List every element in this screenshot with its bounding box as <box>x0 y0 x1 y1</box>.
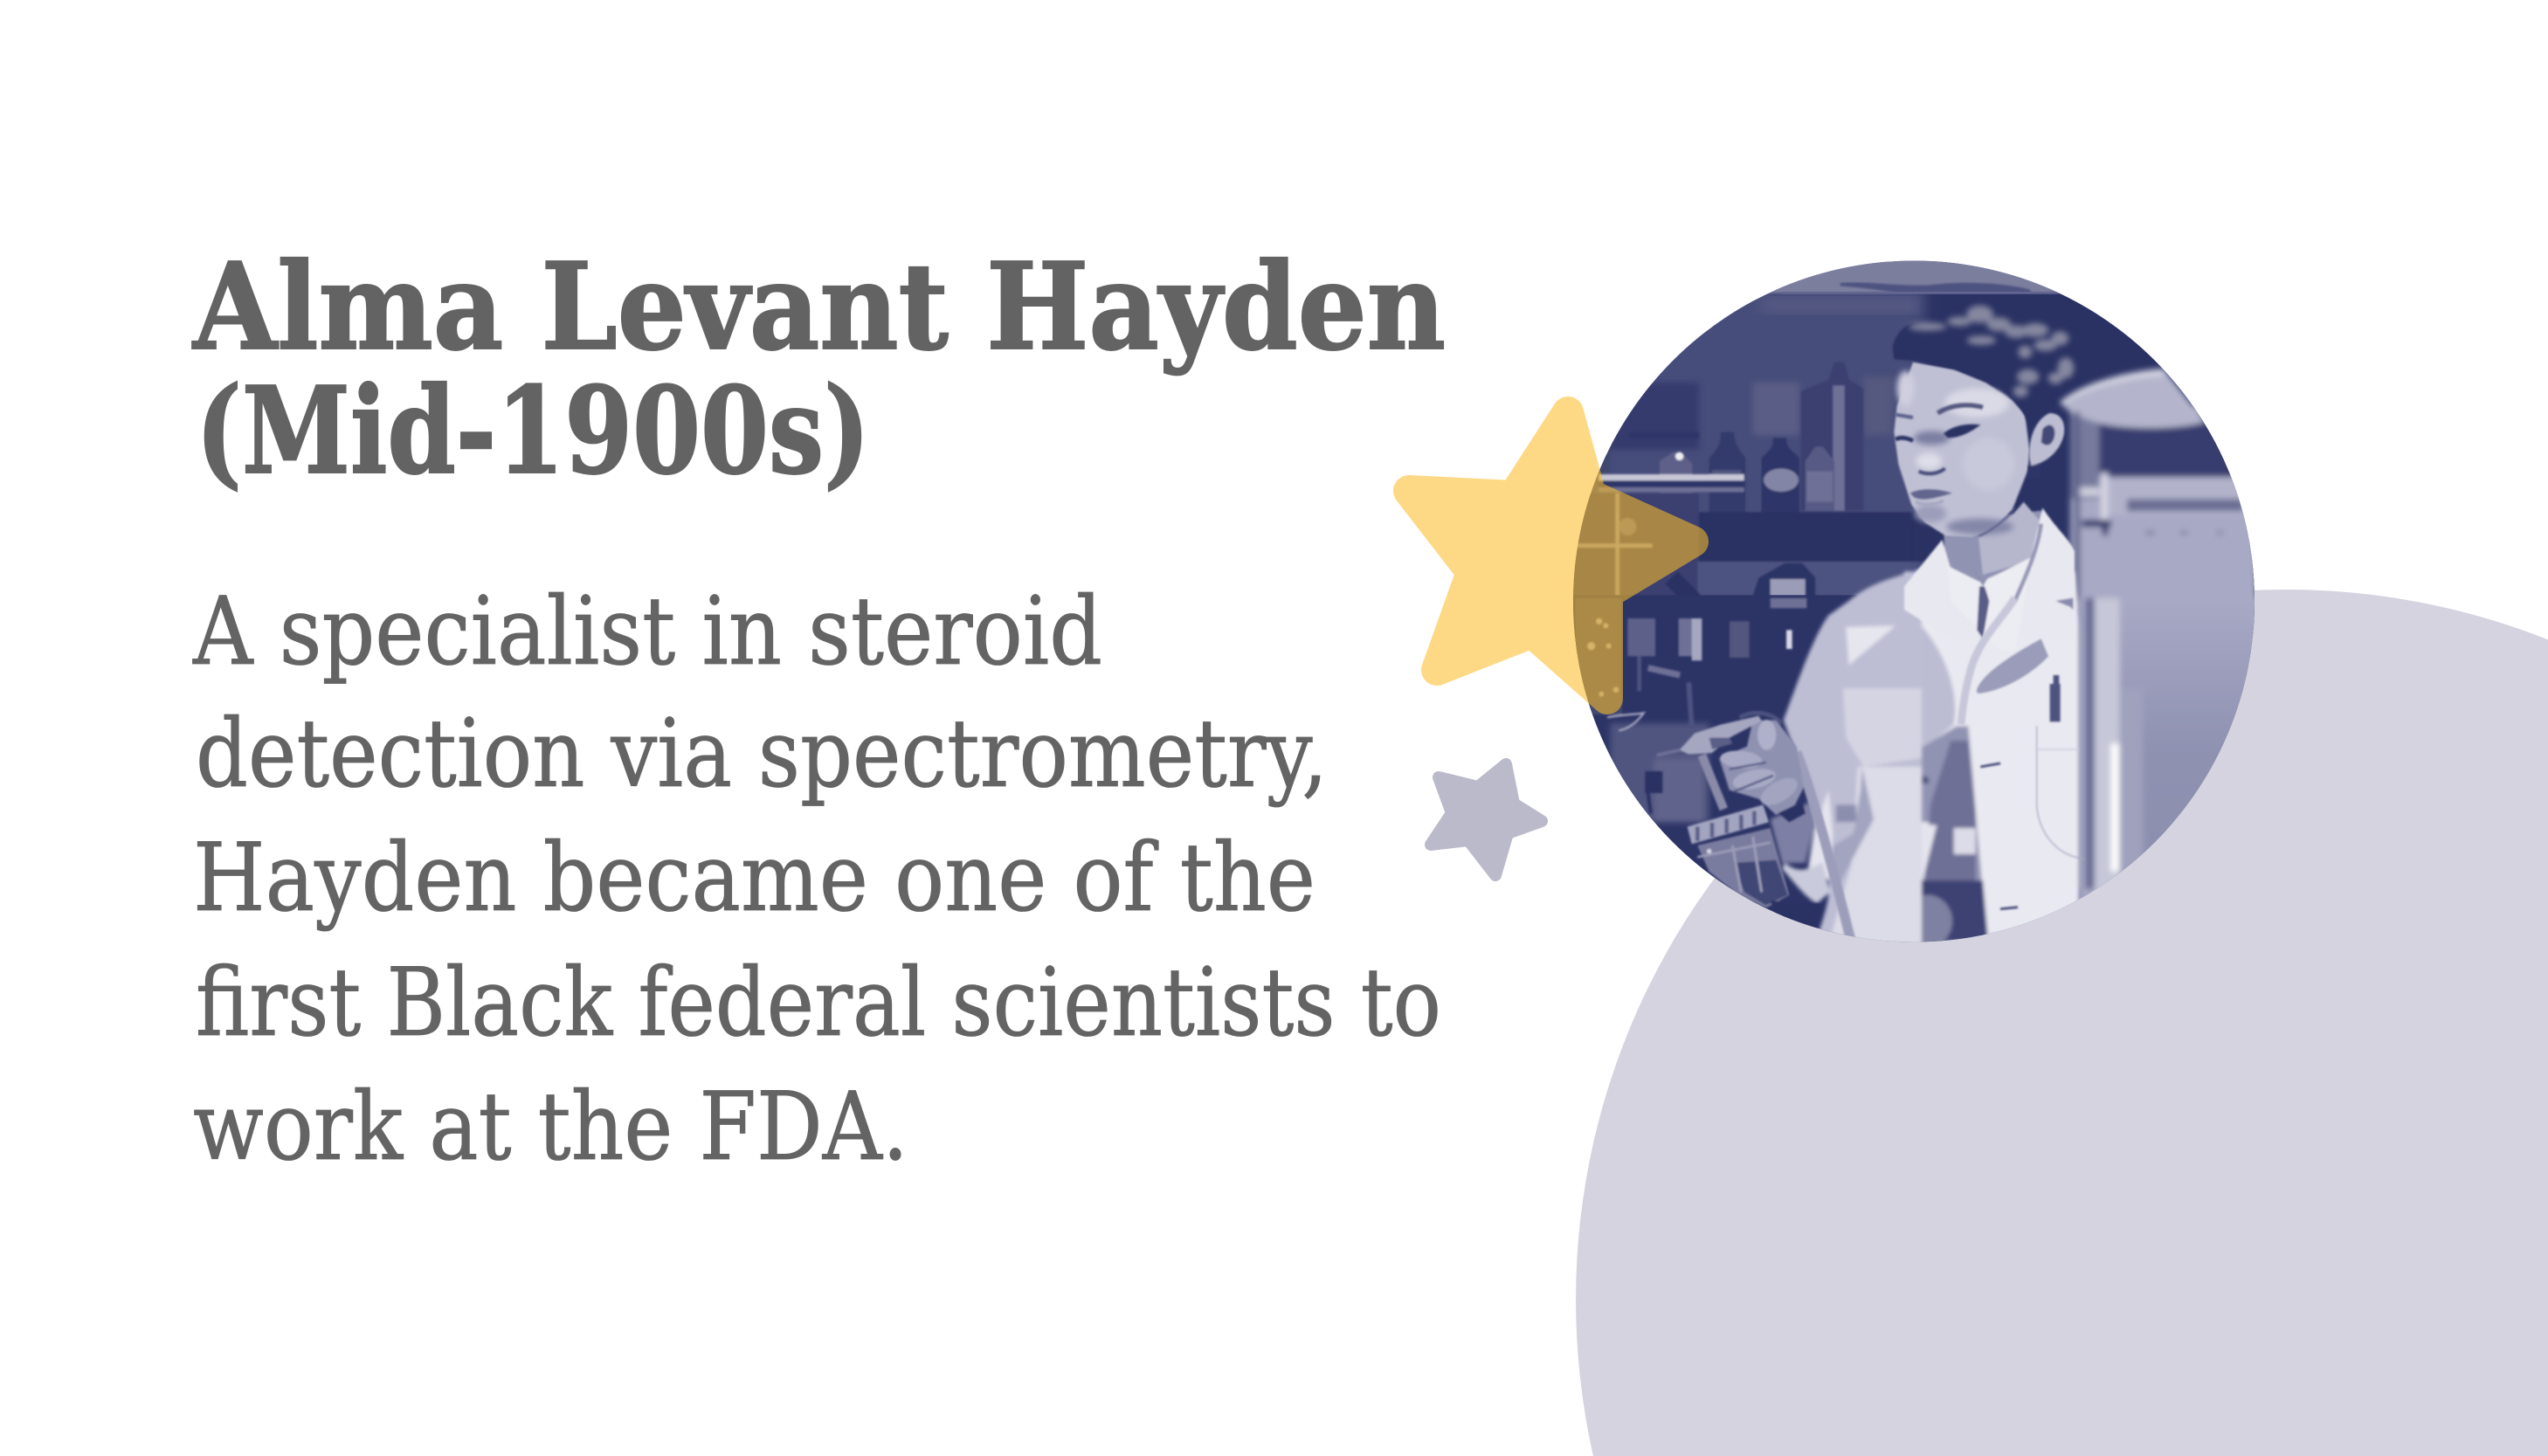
body text: detection via spectrometry, <box>196 700 1328 809</box>
lab background lower left <box>1566 595 1858 944</box>
body text: Hayden became one of the <box>193 824 1315 933</box>
background behind hair, ceiling and cylinder <box>1750 252 2303 627</box>
curls in hair <box>1909 306 2074 397</box>
icon: small lilac star <box>1431 764 1542 875</box>
body text: first Black federal scientists to <box>196 949 1441 1058</box>
sprayer and hand <box>1680 713 1850 939</box>
icon: yellow star <box>1409 412 1693 699</box>
body text: work at the FDA. <box>193 1073 908 1182</box>
coat details <box>1961 598 2085 909</box>
cylinder <box>2056 364 2255 900</box>
title: Alma Levant Hayden <box>191 237 1446 377</box>
photo: scientist in laboratory <box>1573 260 2255 942</box>
title: (Mid-1900s) <box>196 361 870 501</box>
head and shoulders <box>1893 304 2075 651</box>
lab background upper left <box>1572 300 1951 610</box>
background circle <box>1576 590 2548 1456</box>
body text <box>192 577 1441 1182</box>
lab coat <box>1771 569 2079 948</box>
title <box>191 237 1446 501</box>
body text: A specialist in steroid <box>192 577 1102 687</box>
